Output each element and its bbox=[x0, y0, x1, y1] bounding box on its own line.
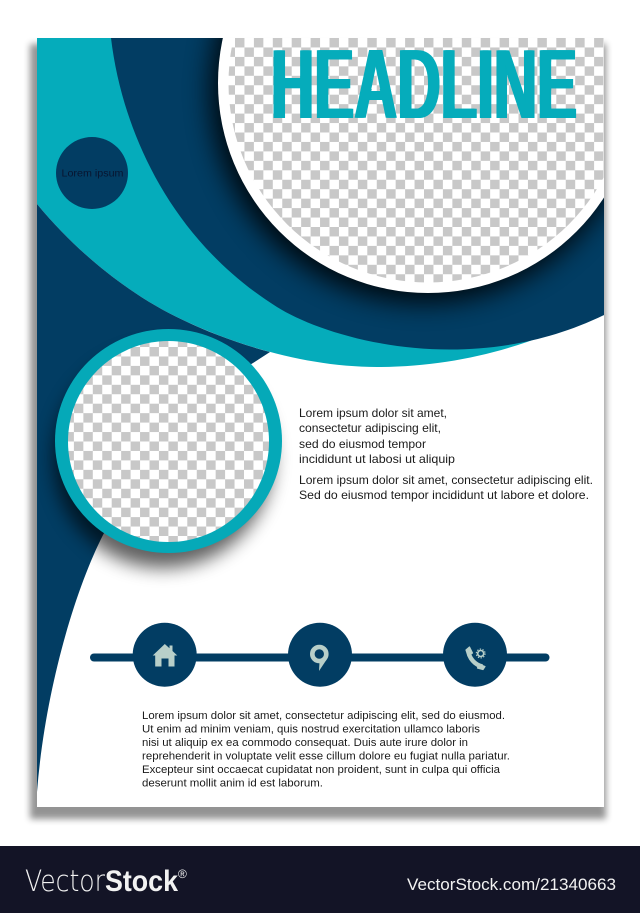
upper-right text block: Lorem ipsum dolor sit amet, bbox=[299, 407, 447, 420]
icon: map pin bbox=[288, 623, 352, 687]
lower text block bbox=[142, 710, 510, 790]
footer logo bbox=[25, 864, 187, 898]
upper-right text block: incididunt ut labosi ut aliquip bbox=[299, 453, 455, 466]
navy upper band bbox=[111, 38, 604, 350]
lower text block: deserunt mollit anim id est laborum. bbox=[142, 778, 323, 790]
shadow of large circle bbox=[194, 38, 604, 319]
upper-right text block: consectetur adipiscing elit, bbox=[299, 422, 441, 435]
lower text block: nisi ut aliquip ex ea commodo consequat. Duis aute irure dolor in bbox=[142, 737, 468, 749]
icon: home bbox=[133, 623, 197, 687]
footer logo: Vector bbox=[25, 864, 106, 898]
small badge circle bbox=[56, 137, 128, 209]
lower text block: reprehenderit in voluptate velit esse cillum dolore eu fugiat nulla pariatur. bbox=[142, 750, 510, 762]
lower text block: Excepteur sint occaecat cupidatat non proident, sunt in culpa qui officia bbox=[142, 764, 501, 776]
footer logo: Stock bbox=[105, 865, 178, 898]
upper-right text block: Lorem ipsum dolor sit amet, consectetur adipiscing elit. bbox=[299, 474, 593, 487]
icon timeline bbox=[90, 623, 550, 687]
navy left wave bbox=[37, 204, 270, 792]
shadow of photo circle bbox=[53, 348, 273, 568]
footer bar bbox=[0, 846, 640, 913]
upper-right text block: sed do eiusmod tempor bbox=[299, 438, 426, 451]
footer id: VectorStock.com/21340663 bbox=[407, 876, 616, 894]
footer logo: ® bbox=[178, 867, 187, 881]
upper-right text block bbox=[299, 407, 593, 502]
small badge circle: Lorem ipsum bbox=[62, 168, 124, 180]
large image circle bbox=[218, 38, 604, 293]
icon: phone with gear bbox=[443, 623, 507, 687]
lower text block: Ut enim ad minim veniam, quis nostrud exercitation ullamco laboris bbox=[142, 724, 480, 736]
upper-right text block: Sed do eiusmod tempor incididunt ut labore et dolore. bbox=[299, 489, 589, 502]
teal swoosh band bbox=[37, 38, 604, 367]
poster sheet bbox=[37, 38, 604, 807]
lower text block: Lorem ipsum dolor sit amet, consectetur adipiscing elit, sed do eiusmod. bbox=[142, 710, 505, 722]
photo circle with teal ring bbox=[55, 329, 282, 553]
